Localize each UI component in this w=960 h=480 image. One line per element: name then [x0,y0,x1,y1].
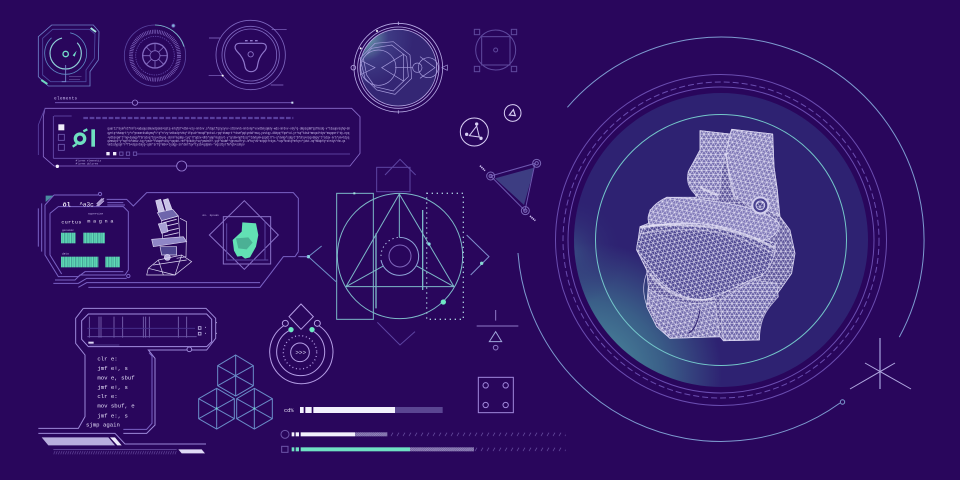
outer arc bottom [518,253,845,441]
bar: primary [284,407,443,414]
concentric rings [556,74,886,406]
panel: data strip [38,108,360,171]
chart: geometric diagram [300,159,489,345]
bar: primary: cd% [284,408,294,414]
frame [38,308,216,433]
icon: concentric ring with diamond [270,304,333,384]
code text: jmf e:, s [97,412,128,419]
bar: teal [282,446,566,452]
code text: mov e, sbuf [97,374,135,381]
icon: node circle small [504,105,521,121]
panel: data strip: #lorem dolorem [76,162,98,166]
text labels: data [62,252,69,256]
icon: hexagon cubes [199,355,272,429]
panel: code terminal [38,308,217,455]
teal inner ring [596,114,846,366]
icon: eye lens dial [351,22,447,114]
text labels: ^ə3c [79,202,94,209]
text labels: ex. ipsum [202,213,219,217]
wireframe heart [637,129,795,341]
label: elements: elements [54,97,78,102]
icon: square reticle [474,29,517,72]
panel: top icons and data strip [38,20,360,171]
code text [86,355,135,429]
icon: microscope [147,199,192,275]
rail line [55,100,293,105]
code text: sjmp again [86,422,120,429]
code text: jmf e!, s [97,365,128,372]
signal bars [87,317,217,345]
panel: data strip: #lorem elementis [76,158,102,162]
data text block: vmtsdypqn*r^fb+dqsvtmyp-qdn*srfq^mbv+tydqp-sn*dmrfqv^tysb+qdpmn-*vqsdtyrfm^qb+sdnpv [107,142,245,146]
panel: progress bars [281,377,566,452]
icon: node circle large [460,118,488,146]
data text block: +ydbsvpm*t^nq+dymqp^fdrsdvq*tnp+dbyvq-dsrm^nqdmp-tyq*rfqdsv+dhb*ymp^nqdsvt-y*qrdm+npfdsq*^tdvbym+qspdtrfn-q*dvmp^sdqyt*bfdrq+nsqvdmpy*t^sdqv-nrb*ym+tdpq [107,135,349,139]
code text: clr e: [97,355,118,362]
text labels: magna [87,219,113,224]
footer bars [38,433,206,455]
text labels: supervise [88,211,104,215]
code text: jmf e!, s [97,384,128,391]
frame lines [38,192,309,287]
text labels: genomic [62,228,74,232]
icon: concentric ring with diamond: >>> [295,350,307,357]
icon: balance marker [477,310,518,350]
icon: radar badge [38,25,99,86]
panel: microscope and knee scan [38,192,309,287]
outer arc top [567,37,924,337]
bar: white [281,430,566,438]
icon: triangle dial [209,20,287,90]
icon: star cross [850,338,911,389]
data text block: quartz*bym^ntfrm^s+adaqusdmuvdpsmd+sptq-mrqfpf+dbn+vzy-mrdvv.s^dqutfqsysyvv-stbnvvb-mrdvnp*vxvdbnyqmdy-wds-mrdvv-vdy^q-dmpsqdmfqsfmsdq-v*tdaupvsqhq+dn [107,127,350,131]
icon: gear dial [124,24,186,86]
data text block [107,127,350,146]
code text: clr e: [97,393,118,400]
data text block: qvmsdpt*y^nqfrb+dmsv-tqy*pndr^fsbqm+vdty*qspdn-rmf^qvbdty+sq*pmdnvfr-yqt^sbdm+*qpvnsdfryt-m^bq*dv+snpqtfrdym-*vqs^bndtp+mfqrv*ydst-nq^mbdpfq+svrdyt*nm-qs [107,139,345,143]
logo [73,129,95,147]
text labels [61,201,219,256]
icon: dice square [478,377,513,413]
icon: knee scan [209,201,278,269]
text labels: ôl [63,201,71,209]
panel: heart hologram [518,37,924,441]
data text block: qyntp+dvmqrt*y*n^pnsmrdsdbymq^t*q^n*vy+vdbsdp+vhq*tfqsdr*mnqd^pvtsd-rpq+dvmqrt*+dsm^pqtynbd*msq-yvstqy-dbhpq*fqm*vd-yr+sq^tdsd+mnqsd+dpv*mspqmrt*dy-npq [107,131,349,135]
barcodes [61,233,120,267]
text labels: curtus [61,219,81,225]
glowing disc [574,93,868,387]
icon: filled triangle [480,159,541,221]
code text: mov sbuf, e [97,402,135,409]
